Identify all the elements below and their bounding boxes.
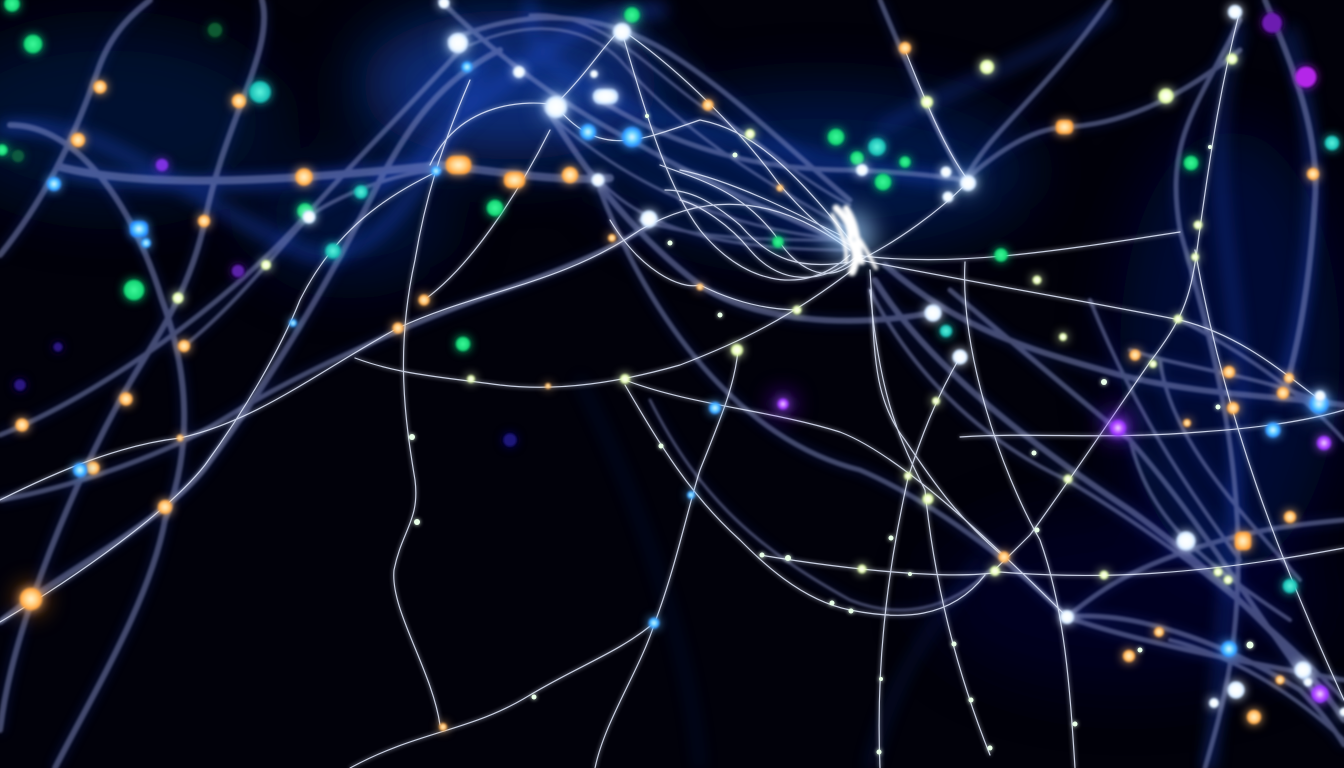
soft halos behind bright hubs <box>16 20 1333 614</box>
pale yellow-green fairy lights <box>172 54 1238 584</box>
tiny sparkle lights <box>409 114 1254 754</box>
green and teal nodes <box>0 0 1339 593</box>
central fibre hub <box>832 208 876 272</box>
blue and cyan nodes <box>47 62 1328 657</box>
white nodes <box>302 0 1344 716</box>
